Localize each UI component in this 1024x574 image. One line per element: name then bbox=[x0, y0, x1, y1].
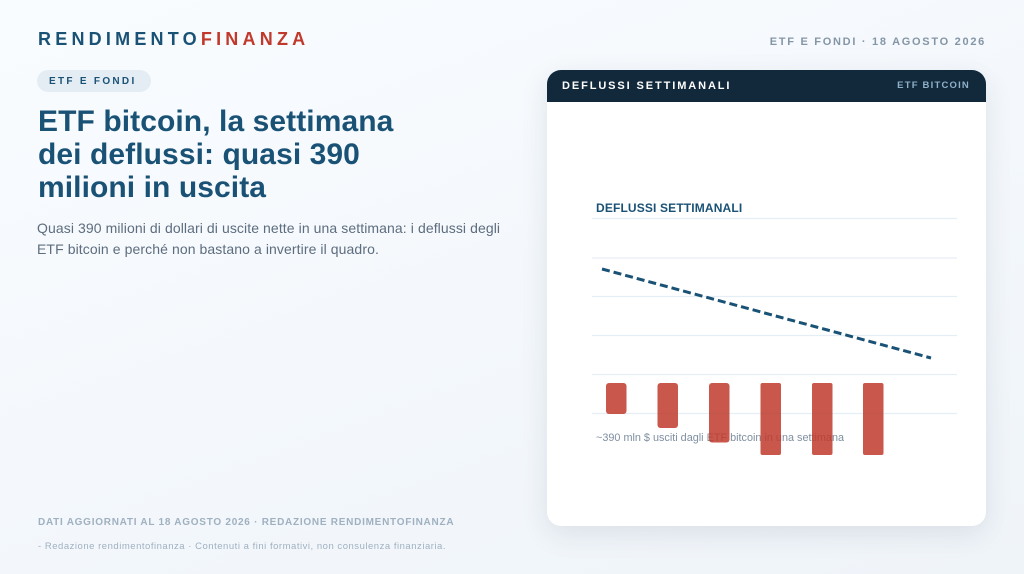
subtitle: ETF bitcoin e perché non bastano a invertire il quadro. bbox=[37, 241, 379, 257]
card header title: DEFLUSSI SETTIMANALI bbox=[562, 80, 731, 92]
main headline: ETF bitcoin, la settimana bbox=[38, 105, 393, 138]
brand logo: RENDIMENTOFINANZA bbox=[38, 29, 309, 49]
trend line bbox=[602, 269, 931, 358]
main headline: milioni in uscita bbox=[38, 171, 266, 204]
chart title: DEFLUSSI SETTIMANALI bbox=[596, 201, 742, 215]
card header bar bbox=[547, 70, 986, 102]
panel: weekly outflows card bbox=[547, 70, 986, 526]
subtitle bbox=[37, 220, 500, 257]
outflow bars bbox=[606, 383, 884, 455]
chart: weekly outflows bbox=[592, 201, 957, 455]
footer update line: DATI AGGIORNATI AL 18 AGOSTO 2026 · REDAZIONE RENDIMENTOFINANZA bbox=[38, 517, 454, 528]
main headline bbox=[38, 105, 394, 204]
caption: ~390 mln $ usciti dagli ETF bitcoin in una settimana bbox=[596, 432, 845, 444]
category pill bbox=[37, 70, 151, 92]
category pill: ETF E FONDI bbox=[49, 76, 137, 87]
subtitle: Quasi 390 milioni di dollari di uscite nette in una settimana: i deflussi degli bbox=[37, 220, 500, 236]
main headline: dei deflussi: quasi 390 bbox=[38, 138, 360, 171]
card header tag: ETF BITCOIN bbox=[897, 80, 970, 91]
footer disclaimer: - Redazione rendimentofinanza · Contenuti a fini formativi, non consulenza finanziaria. bbox=[38, 541, 446, 552]
top-right category and date: ETF E FONDI · 18 AGOSTO 2026 bbox=[770, 36, 986, 48]
